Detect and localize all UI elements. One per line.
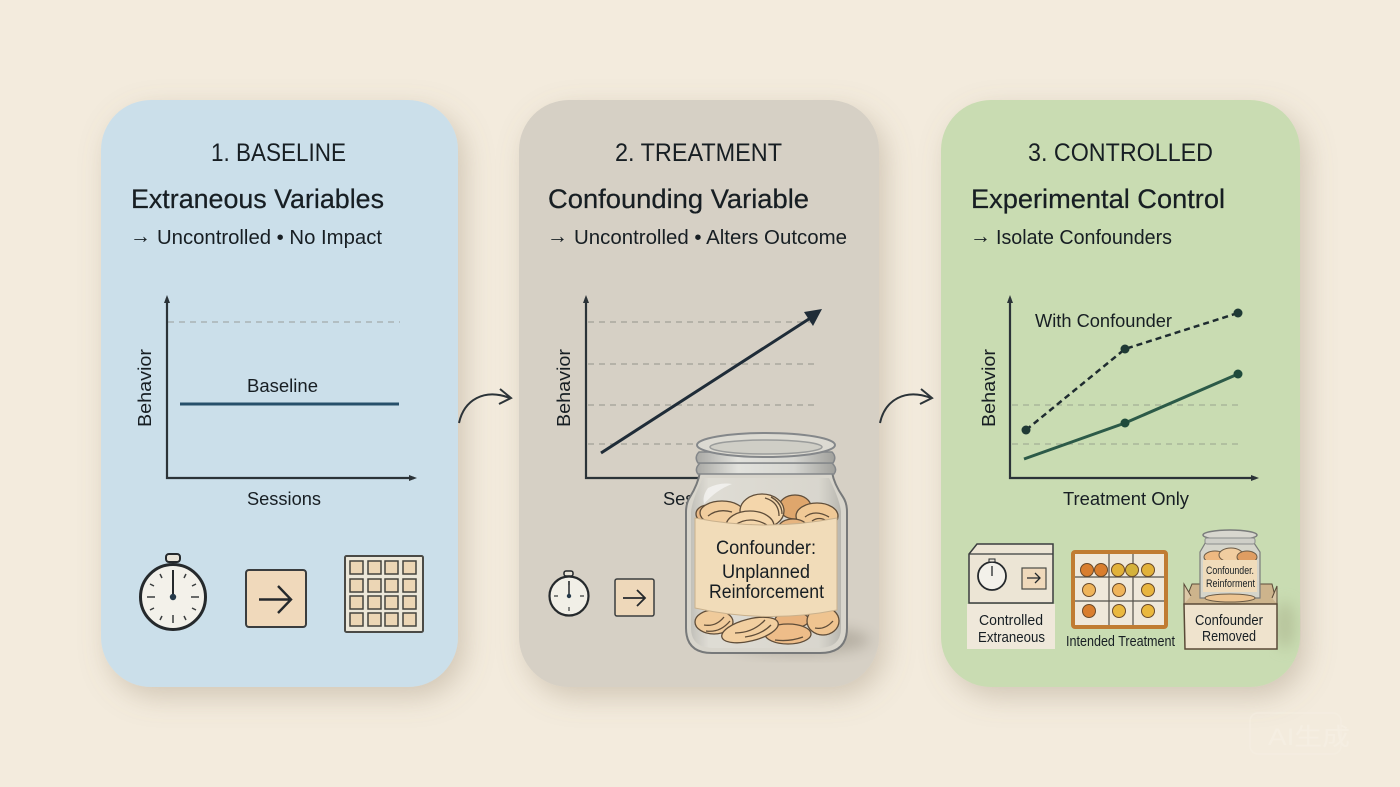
watermark xyxy=(1250,713,1350,754)
chart: baseline line chart xyxy=(134,295,417,509)
text: uncontrolled, no impact: Uncontrolled • No Impact xyxy=(157,226,382,249)
icon: controlled extraneous box: Extraneous xyxy=(978,629,1045,646)
small jar xyxy=(1200,530,1260,602)
subheading: Extraneous Variables: Extraneous Variables xyxy=(131,184,384,214)
icon: confounder removed box with jar: Confounder xyxy=(1195,612,1263,629)
chart: two-line comparison: With Confounder xyxy=(1035,310,1172,331)
jar: unplanned reinforcement xyxy=(686,433,870,654)
panel: baseline xyxy=(101,100,458,687)
chart: rising line chart: Behavior xyxy=(553,349,574,427)
chart: two-line comparison: Treatment Only xyxy=(1063,488,1190,509)
icon: confounder removed box with jar xyxy=(1184,530,1295,649)
icon: controlled extraneous box xyxy=(967,544,1055,649)
chart: two-line comparison: Behavior xyxy=(978,349,999,427)
icon: arrow box xyxy=(246,570,306,627)
icon: stopwatch xyxy=(550,571,588,616)
icon: controlled extraneous box: Controlled xyxy=(979,612,1043,629)
coins xyxy=(695,494,839,648)
chart: baseline line chart: Sessions xyxy=(247,488,321,509)
chart: rising line chart xyxy=(553,295,822,509)
icon: stopwatch xyxy=(140,554,206,630)
text: uncontrolled, no impact: → xyxy=(130,223,151,248)
chart: baseline line chart: Behavior xyxy=(134,349,155,427)
arrow: baseline to treatment xyxy=(459,389,511,423)
text: uncontrolled, alters outcome: Uncontrolled • Alters Outcome xyxy=(574,226,847,249)
text: uncontrolled, alters outcome: → xyxy=(547,223,568,248)
icon: arrow box xyxy=(615,579,654,616)
icon: grid xyxy=(345,556,423,632)
icon: confounder removed box with jar: Removed xyxy=(1202,628,1256,645)
panel: treatment xyxy=(519,100,879,687)
heading: 1. BASELINE: 1. BASELINE xyxy=(211,139,346,167)
jar: unplanned reinforcement: Unplanned xyxy=(722,562,810,583)
text: isolate confounders: → xyxy=(970,223,991,248)
icon: intended treatment board: Intended Treatment xyxy=(1066,634,1175,650)
chart: baseline line chart: Baseline xyxy=(247,375,318,396)
panel: controlled xyxy=(941,100,1300,687)
chart: two-line comparison xyxy=(978,295,1259,509)
chart: rising line chart: Sessions xyxy=(663,488,737,509)
label xyxy=(695,518,837,617)
watermark: AI生成 xyxy=(1268,724,1350,751)
small jar: Reinforment xyxy=(1206,578,1255,590)
small jar: Confounder. xyxy=(1206,565,1254,577)
jar: unplanned reinforcement: Reinforcement xyxy=(709,582,825,603)
subheading: Confounding Variable: Confounding Variable xyxy=(548,184,809,214)
heading: 2. TREATMENT: 2. TREATMENT xyxy=(615,139,782,167)
icon: intended treatment board xyxy=(1066,552,1175,650)
jar: unplanned reinforcement: Confounder: xyxy=(716,538,816,559)
text: isolate confounders: Isolate Confounders xyxy=(996,226,1172,249)
heading: 3. CONTROLLED: 3. CONTROLLED xyxy=(1028,139,1213,167)
subheading: Experimental Control: Experimental Control xyxy=(971,184,1225,214)
arrow: treatment to controlled xyxy=(880,389,932,423)
